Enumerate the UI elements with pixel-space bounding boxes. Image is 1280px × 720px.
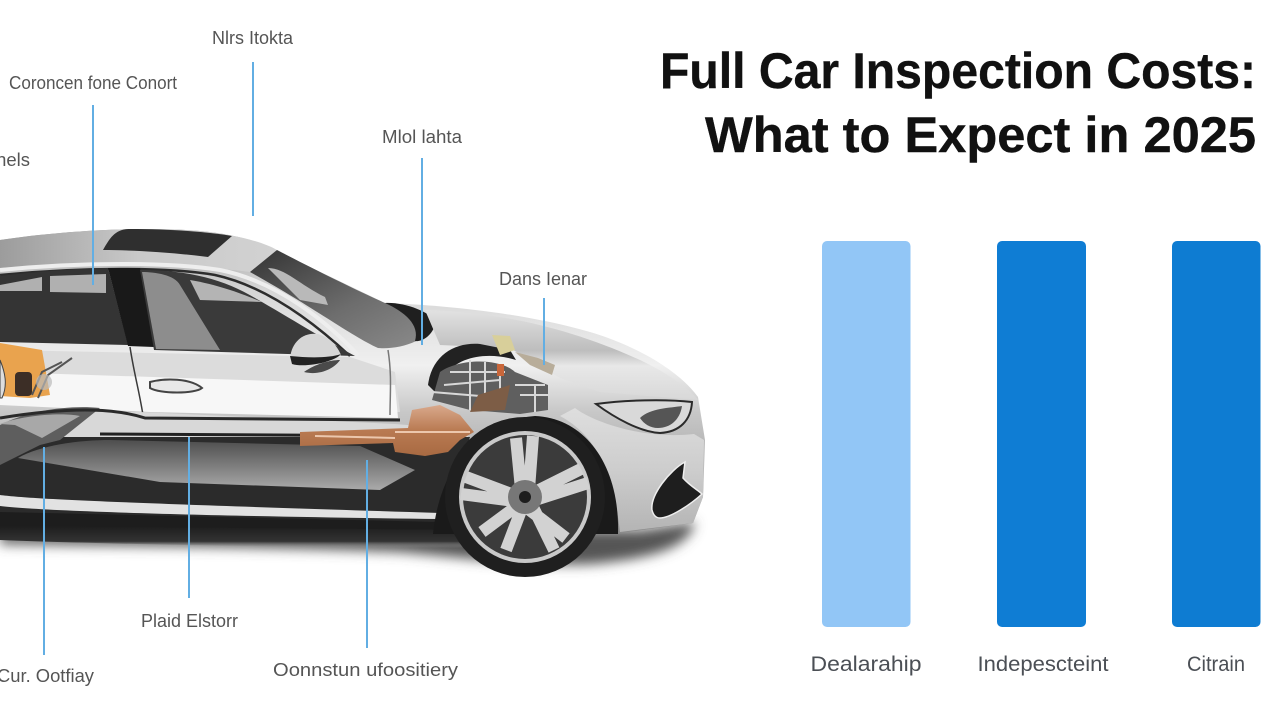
rear side window — [0, 268, 128, 345]
title: Full Car Inspection Costs: — [660, 43, 1256, 99]
callout: lower label center: Plaid Elstorr — [141, 611, 238, 631]
front lower intake — [652, 462, 702, 518]
bar chart — [810, 241, 1260, 676]
title: What to Expect in 2025 — [705, 107, 1256, 163]
B pillar — [108, 268, 154, 347]
roof panel — [0, 229, 277, 272]
bar: independent: Indepescteint — [978, 653, 1109, 676]
front wheel — [445, 417, 605, 577]
shoulder highlight — [0, 350, 400, 412]
callout: engine label: Dans Ienar — [499, 269, 587, 289]
sunroof — [103, 229, 232, 257]
windshield — [250, 250, 436, 348]
hood highlights — [425, 310, 698, 400]
callout: top label 1: Nlrs Itokta — [212, 28, 294, 48]
cutaway: engine and suspension — [428, 335, 555, 414]
cutaway: rear orange mechanism — [0, 343, 72, 398]
side mirror — [290, 334, 341, 373]
lower door reflection — [18, 440, 415, 490]
cutaway: copper floor rail — [300, 405, 474, 456]
front bumper — [560, 408, 704, 532]
bar: chain: Citrain — [1187, 653, 1245, 676]
wheel arch — [433, 416, 618, 534]
callout: top label 2: Coroncen fone Conort — [9, 73, 177, 93]
chrome sill strip — [0, 495, 440, 519]
underbody fade — [0, 526, 480, 548]
title — [660, 43, 1256, 163]
bar: independent — [978, 241, 1109, 676]
callout: windshield label: Mlol lahta — [382, 127, 463, 147]
headlight — [596, 400, 692, 433]
bar: chain — [1172, 241, 1260, 676]
roof rail chrome — [0, 264, 358, 355]
bar: dealership: Dealarahip — [810, 653, 922, 676]
bar: dealership — [810, 241, 922, 676]
callout: lower label right: Oonnstun ufoositiery — [273, 660, 458, 680]
car ground shadow — [0, 522, 695, 565]
rear sweep panel — [0, 407, 100, 465]
car body silhouette — [0, 229, 705, 533]
door handle — [150, 380, 202, 392]
front side window — [140, 270, 355, 356]
door shut line — [130, 347, 146, 436]
car illustration — [0, 229, 705, 577]
lower body — [0, 411, 470, 532]
callout: engine label — [499, 269, 587, 365]
spokes — [461, 436, 588, 550]
body seam — [0, 410, 400, 420]
tyre — [445, 417, 605, 577]
